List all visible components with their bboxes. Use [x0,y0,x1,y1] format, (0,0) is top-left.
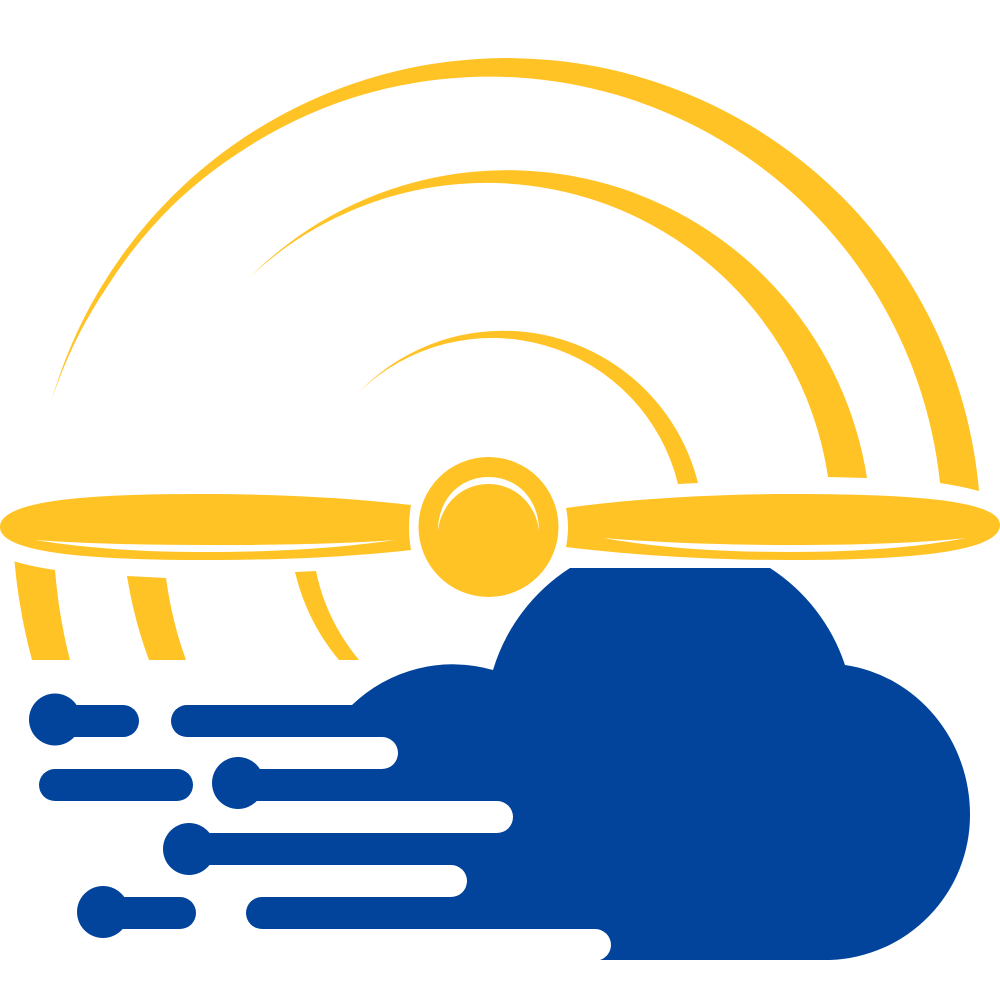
outer arc [52,58,979,491]
propeller hub [418,457,558,597]
speed line: bottom left [77,886,196,938]
motion arc segments below propeller [14,562,359,660]
middle segment [127,576,186,660]
inner segment [295,571,359,660]
speed line: second row left [39,769,193,801]
speed line: top left [29,694,139,746]
cloud body [171,568,970,960]
outer segment [14,562,70,660]
speed line circle, row 2 [212,757,264,809]
middle arc [250,170,867,478]
right propeller blade [566,494,1000,560]
inner arc [359,331,698,484]
cloud with speed lines [29,568,970,960]
motion arcs above propeller [52,58,979,491]
left propeller blade [0,494,411,560]
speed line circle, row 3 [163,823,215,875]
